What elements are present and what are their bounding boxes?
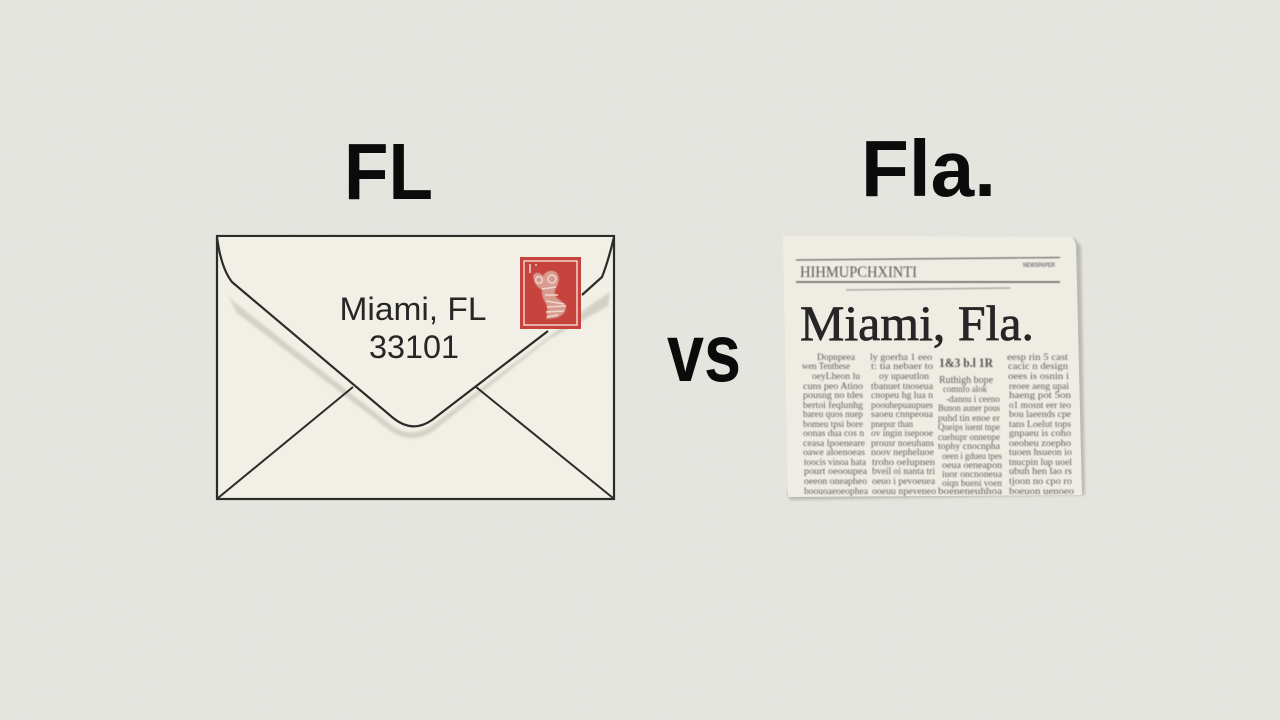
column 1: bareu quos nuep — [803, 409, 863, 420]
envelope illustration — [217, 236, 614, 499]
column 3: tophy cnocnpha — [938, 441, 1001, 452]
newspaper bottom edge — [790, 496, 1076, 498]
column 3: cuehupr onnenpe — [938, 432, 1001, 443]
column 4: ubuh hen lao rs — [1009, 466, 1072, 477]
column 2: cnopeu hg lua n — [871, 390, 933, 401]
column 2: oeuo i pevoeuea — [872, 476, 936, 487]
column 4: bou laeends cpe — [1009, 409, 1072, 420]
newspaper headline: Miami, Fla. — [800, 295, 1034, 351]
column 4: gnpaeu is coho — [1009, 428, 1071, 439]
column 3: puhd tin enoe er — [938, 413, 1001, 424]
column 2: ov ingin isepooe — [871, 428, 934, 439]
column 4: tjoon no cpo ro — [1009, 476, 1072, 487]
column 1: wen Tenthese — [802, 361, 851, 372]
newspaper illustration — [783, 236, 1085, 500]
column 4: boeuon uenoeo — [1009, 486, 1074, 497]
column 2: saoeu cnnpeoua — [871, 409, 934, 420]
heading: FL: FL — [344, 127, 433, 216]
column 1: pousng no tdes — [803, 390, 863, 401]
masthead: HIHMUPCHXINTI — [800, 264, 917, 281]
column 2: ooeuu npeveneo — [872, 486, 936, 497]
column 1: bertoi feqlunhg — [803, 400, 863, 411]
column 2: pnepur than — [871, 419, 913, 430]
column 1: oeeon oneapheo — [804, 476, 867, 487]
column 4: oees is osnin i — [1008, 371, 1069, 382]
column 4: haeng pot 5on — [1009, 390, 1071, 401]
column 3: iuor oncnoneua — [942, 469, 1003, 480]
postage stamp — [520, 257, 581, 329]
column 4: eesp rin 5 cast — [1007, 352, 1068, 363]
column 1 — [802, 352, 869, 497]
column 4: tuoen hsueon io — [1009, 447, 1072, 458]
column 3: -dannu i ceeno — [946, 394, 1000, 405]
newspaper shadow — [787, 238, 1085, 500]
column 4: tans Loelut tops — [1009, 419, 1071, 430]
label: vs: vs — [667, 308, 741, 399]
column 2: noov nepheluoe — [871, 447, 935, 458]
column 3: comnfo alok — [943, 384, 987, 395]
flap shadow — [224, 286, 610, 438]
column 1: cuns peo Atino — [803, 381, 863, 392]
masthead: NEWSPAPER — [1023, 263, 1056, 269]
column 4: cacic n design — [1008, 361, 1068, 372]
column 3 — [938, 355, 1003, 497]
column 1: Dopnpeea — [817, 352, 856, 363]
column 2: poouhepuaupues — [871, 400, 933, 411]
column 2 — [870, 352, 936, 497]
column 3: oeua oeneapon — [942, 460, 1002, 471]
column 4 — [1007, 352, 1074, 497]
column 1: oonas dua cos n — [803, 428, 864, 439]
column 4: reoee aeng upai — [1009, 381, 1069, 392]
column 3: Bunon auner pous — [938, 403, 1000, 414]
column 1: oawe aloenoeas — [803, 447, 865, 458]
address text: Miami, FL — [340, 291, 486, 327]
envelope lower fold lines — [218, 387, 613, 498]
column 2: tbanuet tnoseua — [871, 381, 934, 392]
column 2: t: tia nebaer to — [871, 361, 933, 372]
column 2: troho oelupnen — [872, 457, 935, 468]
column 1: ceasa lpoeneare — [803, 438, 866, 449]
envelope flap — [217, 237, 614, 427]
newspaper sheet — [783, 236, 1082, 497]
column 3: Queips iuent tnpe — [938, 422, 1001, 433]
column 4: o1 mosnt eer teo — [1009, 400, 1071, 411]
column 4: oeoheu zoepho — [1009, 438, 1071, 449]
column 3: oeen i gdueu tpes — [942, 451, 1002, 462]
envelope body — [217, 236, 614, 499]
column 4: tnucpin lup uoel — [1009, 457, 1072, 468]
column 3: boeneneuhhoa — [938, 486, 1003, 497]
column 1: oeyLheon lu — [812, 371, 860, 382]
address text — [340, 291, 486, 365]
column 2: ly goerha 1 eeo — [870, 352, 932, 363]
column 2: bveil oi nanta tri — [872, 466, 935, 477]
column 3: 1&3 b.l 1R — [939, 355, 994, 370]
heading: Fla.: Fla. — [861, 124, 996, 213]
column 1: bomeu tpsi bore — [803, 419, 864, 430]
address text: 33101 — [369, 329, 459, 365]
masthead — [796, 258, 1060, 290]
column 2: prousr noeuhans — [871, 438, 934, 449]
column 3: oiqn bueni voen — [942, 478, 1002, 489]
column 1: pourt oeooupea — [804, 466, 868, 477]
column 2: oy upaeutlon — [879, 371, 929, 382]
column 3: Ruthigh bope — [939, 375, 994, 386]
newspaper columns — [802, 352, 1074, 497]
column 1: boouoaeoeophea — [804, 486, 869, 497]
column 1: toocis vinoa hata — [804, 457, 867, 468]
